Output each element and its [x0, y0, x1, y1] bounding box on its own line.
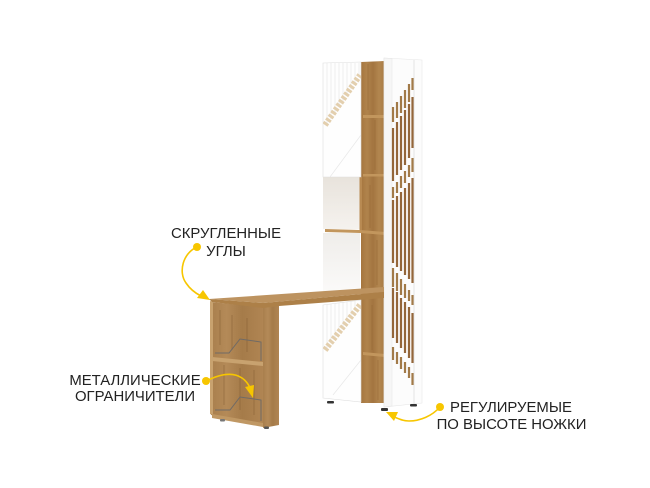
open niche: [323, 177, 362, 292]
callout: adjustable feet: ПО ВЫСОТЕ НОЖКИ: [437, 417, 586, 433]
feet: [220, 401, 417, 429]
pedestal grain: [220, 310, 274, 420]
label: СКРУГЛЕННЫЕ: [171, 226, 281, 242]
infographic canvas: [70, 58, 586, 429]
desk top: [209, 287, 384, 303]
desk top edges: [209, 292, 384, 308]
slats group 2: [393, 97, 412, 181]
callout: rounded corners: УГЛЫ: [206, 244, 246, 260]
slats group 1: [393, 78, 412, 122]
dot and arrow: [182, 243, 210, 300]
wood grain: [368, 64, 378, 400]
wooden back panel: [361, 61, 385, 403]
pedestal end panel: [263, 305, 279, 428]
shelves: [325, 115, 385, 357]
metal limiters: [215, 339, 261, 421]
slats group 5: [393, 268, 412, 305]
label: РЕГУЛИРУЕМЫЕ: [450, 400, 572, 416]
pedestal inner panel: [211, 302, 263, 424]
slats group 7: [393, 347, 412, 385]
callout: adjustable feet: [386, 400, 586, 433]
callout: metal limiters: ОГРАНИЧИТЕЛИ: [75, 389, 195, 405]
pedestal left edge: [210, 301, 213, 415]
slats group 4: [393, 178, 412, 283]
pedestal bottom shelf: [212, 414, 263, 427]
slats group 6: [393, 288, 412, 363]
callout: rounded corners: [171, 226, 281, 300]
desk: [209, 287, 384, 428]
callout: metal limiters: [69, 373, 254, 405]
dot and arrow: [202, 374, 254, 398]
label: МЕТАЛЛИЧЕСКИЕ: [69, 373, 201, 389]
top door: [323, 62, 361, 177]
side panel with slats: [384, 58, 422, 407]
pedestal shelf: [212, 357, 263, 366]
slats group 3: [393, 158, 412, 198]
bottom door: [323, 300, 361, 402]
bookcase tower: [323, 58, 422, 407]
dot and arrow: [386, 403, 444, 421]
